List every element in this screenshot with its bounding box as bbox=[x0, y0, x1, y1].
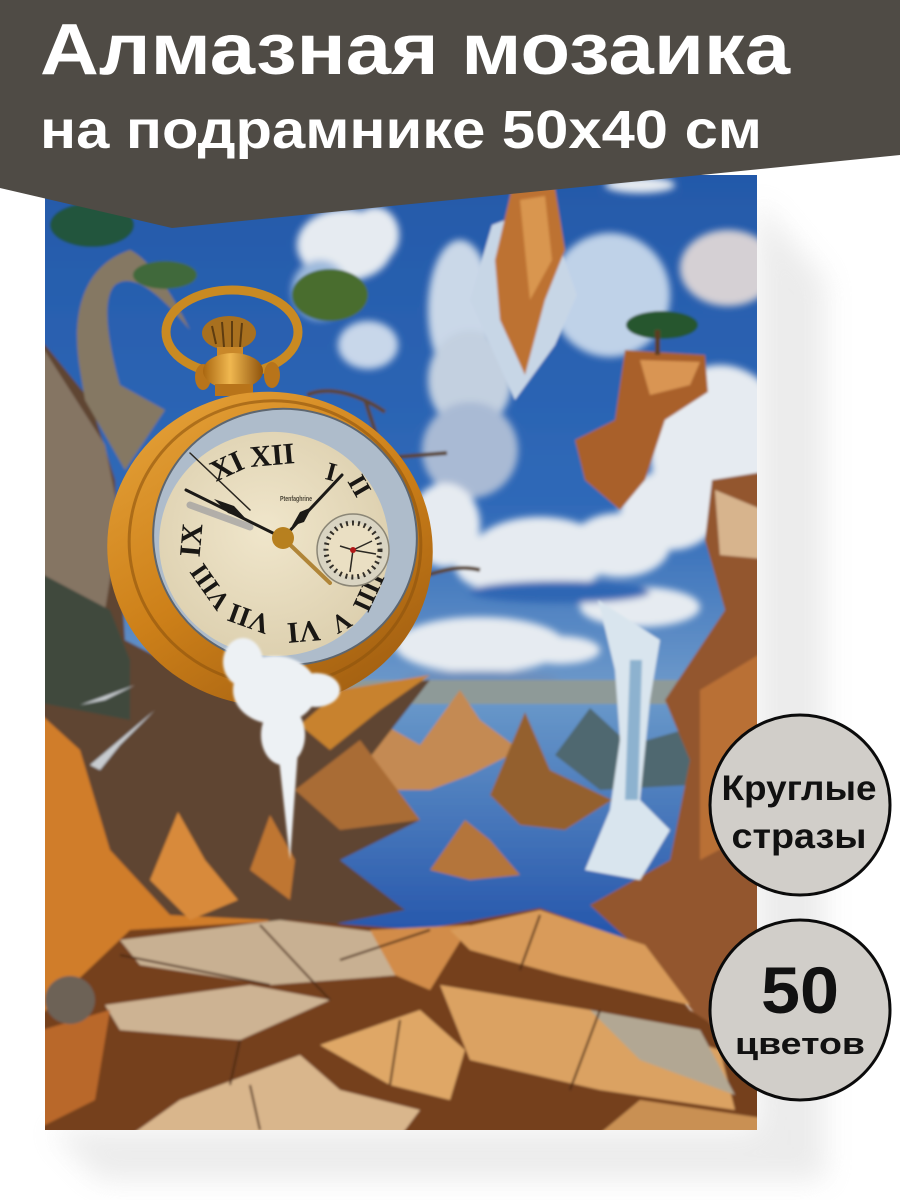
watch ring bbox=[166, 290, 298, 374]
floating rock with snow bbox=[480, 190, 567, 402]
maker name: Ptenfaghrine bbox=[280, 496, 312, 503]
roman numerals: II bbox=[342, 470, 377, 502]
stone bbox=[45, 976, 95, 1024]
badge: round rhinestones bbox=[710, 715, 890, 895]
badge: 50 colors: 50 bbox=[761, 953, 839, 1027]
roman numerals: XII bbox=[248, 437, 296, 474]
badge: round rhinestones: Круглые bbox=[722, 769, 876, 808]
roman numerals: XI bbox=[205, 444, 249, 488]
roman numerals: IX bbox=[174, 522, 209, 558]
watch face bbox=[152, 408, 418, 665]
lake base bbox=[336, 705, 686, 940]
title bbox=[40, 10, 791, 160]
waterfall bbox=[585, 600, 670, 880]
watch hands bbox=[186, 453, 342, 583]
roman numerals: VI bbox=[286, 614, 322, 649]
melting ice bbox=[223, 638, 340, 860]
painting bbox=[45, 175, 757, 1130]
bird shape bbox=[80, 685, 155, 770]
title line 2: на подрамнике 50х40 см bbox=[40, 100, 762, 160]
distant landscape bbox=[340, 680, 710, 880]
roman numerals: VII bbox=[224, 596, 274, 640]
badge: 50 colors: цветов bbox=[735, 1026, 865, 1061]
clouds bbox=[292, 177, 790, 685]
watch crown bbox=[195, 316, 280, 396]
small dial bbox=[317, 514, 389, 586]
title line 1: Алмазная мозаика bbox=[40, 10, 791, 90]
badge: 50 colors bbox=[710, 920, 890, 1100]
watch case bbox=[107, 392, 433, 702]
cracked foreground bbox=[45, 906, 757, 1130]
roman numerals bbox=[180, 444, 384, 643]
floating rock with trees bbox=[575, 311, 708, 510]
left cliff bbox=[45, 342, 430, 926]
roman numerals: V bbox=[326, 605, 357, 640]
header banner bbox=[0, 0, 900, 228]
sky bbox=[45, 175, 757, 682]
badge: round rhinestones: стразы bbox=[732, 817, 866, 856]
canvas drop shadow bbox=[50, 200, 825, 1180]
roman numerals: I bbox=[323, 456, 340, 487]
left tree bbox=[50, 203, 368, 470]
right cliff bbox=[589, 471, 757, 1024]
pocket watch bbox=[107, 286, 433, 860]
roman numerals: IIII bbox=[347, 567, 390, 616]
roman numerals: VIII bbox=[184, 558, 236, 615]
thin branches bbox=[307, 391, 480, 575]
